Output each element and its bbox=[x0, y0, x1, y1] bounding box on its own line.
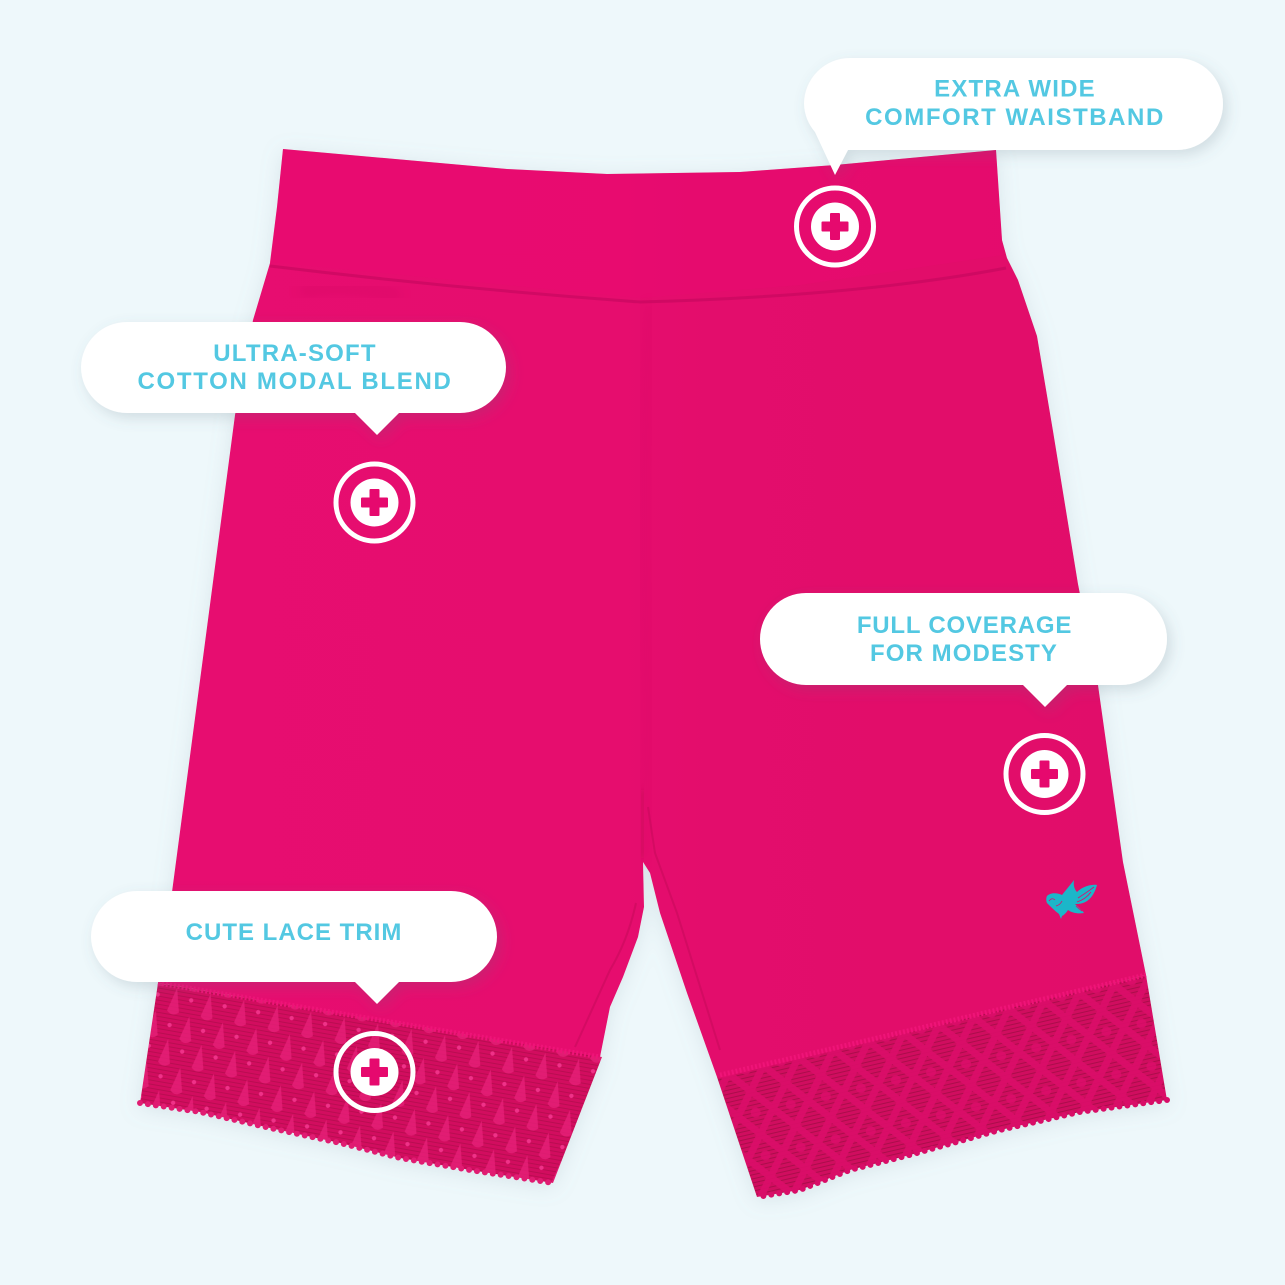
left inner fold bbox=[575, 903, 636, 1047]
callout text: fabric: COTTON MODAL BLEND bbox=[137, 368, 453, 395]
shorts body bbox=[158, 149, 1146, 1078]
waistband seam bbox=[270, 266, 1006, 302]
hip shadow left bbox=[300, 288, 400, 296]
right inner fold bbox=[648, 807, 720, 1050]
right hem seam bbox=[720, 975, 1146, 1075]
icon: fish logo bbox=[1046, 880, 1097, 919]
callout text: waistband: EXTRA WIDE bbox=[934, 76, 1096, 103]
callout: waistband bbox=[804, 58, 1223, 175]
callout text: waistband: COMFORT WAISTBAND bbox=[865, 104, 1165, 131]
marker: coverage bbox=[1006, 736, 1083, 812]
shorts garment bbox=[140, 149, 1167, 1197]
callout: fabric bbox=[81, 322, 506, 435]
crotch fold bbox=[642, 790, 643, 858]
waistband highlight bbox=[270, 149, 1003, 298]
left lace trim bbox=[140, 983, 602, 1183]
callout text: lace: CUTE LACE TRIM bbox=[186, 919, 402, 946]
callout text: coverage: FOR MODESTY bbox=[870, 640, 1058, 667]
callout text: fabric: ULTRA-SOFT bbox=[213, 340, 377, 367]
marker: lace bbox=[336, 1034, 413, 1110]
left hem seam bbox=[158, 983, 600, 1057]
callout: lace bbox=[91, 891, 497, 1004]
callout text: coverage: FULL COVERAGE bbox=[857, 612, 1072, 639]
right lace trim bbox=[717, 975, 1167, 1197]
marker: waistband bbox=[796, 188, 874, 265]
callout: coverage bbox=[760, 593, 1167, 707]
center crease bbox=[642, 304, 650, 860]
marker: fabric bbox=[336, 464, 413, 541]
